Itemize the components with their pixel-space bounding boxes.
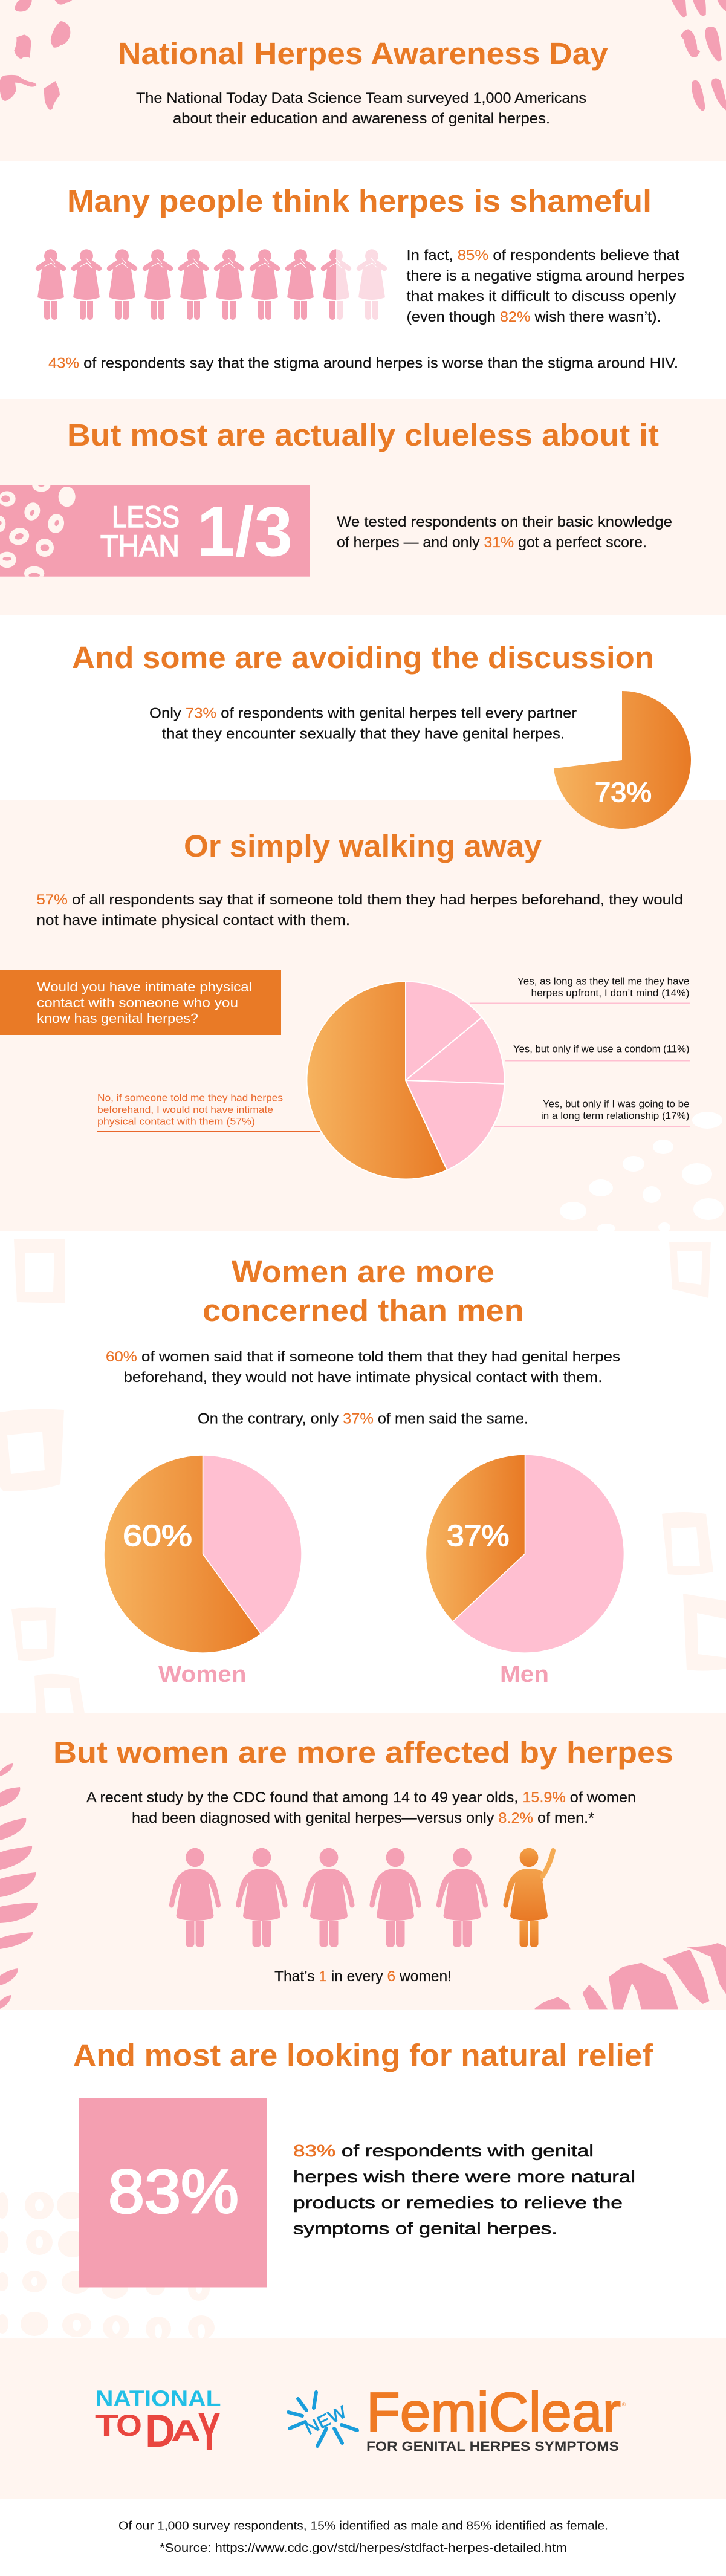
- stigma text: there is a negative stigma around herpes: [406, 268, 684, 284]
- pie chart: 73%: 73%: [595, 777, 652, 808]
- label: 14%: herpes upfront, I don’t mind (14%): [531, 988, 689, 999]
- panel: walking away: [0, 800, 726, 1233]
- label: Men: Men: [500, 1662, 549, 1687]
- callout: 83%: 83%: [108, 2157, 239, 2226]
- natural remedies text: symptoms of genital herpes.: [293, 2219, 557, 2238]
- icon: blue starburst: [288, 2392, 357, 2446]
- pie chart: women 60%: [104, 1455, 302, 1653]
- comparison text: beforehand, they would not have intimate physical contact with them.: [123, 1369, 602, 1386]
- stigma text: (even though 82% wish there wasn’t).: [406, 309, 661, 325]
- question box: contact with someone who you: [37, 995, 238, 1010]
- icon: orange woman: [503, 1848, 553, 1947]
- heading: But women are more affected by herpes: [53, 1735, 673, 1770]
- comparison text: On the contrary, only 37% of men said the same.: [198, 1411, 528, 1427]
- natural remedies text: 83% of respondents with genital: [293, 2141, 594, 2160]
- intro text: [136, 90, 586, 127]
- decoration: pink brush strokes at bottom right: [535, 1943, 726, 2009]
- decoration: top-right pink brush blotches: [672, 0, 726, 111]
- partner text: Only 73% of respondents with genital herpes tell every partner: [149, 705, 577, 722]
- label: 17%: in a long term relationship (17%): [541, 1111, 689, 1121]
- title: National Herpes Awareness Day: [118, 36, 609, 71]
- label: 14%: Yes, as long as they tell me they have: [517, 976, 689, 987]
- callout: less than 1/3: 1/3: [197, 492, 293, 571]
- heading: But most are actually clueless about it: [67, 418, 659, 452]
- heading: Many people think herpes is shameful: [67, 184, 652, 218]
- logo: FemiClear: FemiClear: [366, 2382, 621, 2443]
- natural remedies text: [293, 2141, 635, 2238]
- survey note: Of our 1,000 survey respondents, 15% identified as male and 85% identified as female.: [118, 2520, 608, 2533]
- intro text: about their education and awareness of genital herpes.: [173, 111, 550, 127]
- heading: And some are avoiding the discussion: [72, 640, 654, 675]
- knowledge text: of herpes — and only 31% got a perfect score.: [337, 534, 647, 551]
- question box: know has genital herpes?: [37, 1011, 198, 1026]
- decoration: pink leaves on left edge: [0, 1763, 38, 2009]
- intro text: not have intimate physical contact with them.: [36, 912, 350, 929]
- logo: FemiClear: ®: [622, 2402, 626, 2407]
- label: 57%: No, if someone told me they had herpes: [97, 1093, 283, 1104]
- panel: clueless: [0, 399, 726, 615]
- stigma text: [406, 247, 684, 325]
- comparison text: 60% of women said that if someone told them that they had genital herpes: [106, 1349, 620, 1365]
- question box: [0, 970, 281, 1035]
- pie chart: intimate contact answers: [306, 982, 504, 1179]
- decoration: pale rounded squares: [0, 1239, 726, 1713]
- callout: less than 1/3: LESS: [112, 500, 180, 534]
- icon row: five pink women, one orange woman raising her arm: [169, 1848, 553, 1947]
- partner text: that they encounter sexually that they have genital herpes.: [162, 725, 565, 742]
- logo: FemiClear: [288, 2382, 626, 2454]
- CDC study text: [86, 1789, 636, 1826]
- logo: National Today: A: [171, 2415, 201, 2447]
- question box: Would you have intimate physical: [37, 979, 252, 994]
- HIV comparison text: 43% of respondents say that the stigma around herpes is worse than the stigma around HIV.: [48, 355, 678, 371]
- decoration: top-left pink brush blotches: [0, 0, 72, 110]
- label: 17%: [494, 1099, 690, 1127]
- pie chart: women 60%: 60%: [123, 1520, 192, 1552]
- partner text: [149, 705, 577, 742]
- intro text: The National Today Data Science Team surveyed 1,000 Americans: [136, 90, 586, 106]
- pie chart: men 37%: 37%: [447, 1520, 509, 1552]
- heading: Women are more: [232, 1254, 494, 1289]
- callout: 83%: [79, 2098, 267, 2288]
- heading: Or simply walking away: [184, 829, 542, 863]
- panel: shame: [35, 189, 684, 371]
- knowledge text: We tested respondents on their basic knowledge: [337, 514, 672, 530]
- heading: concerned than men: [203, 1293, 524, 1328]
- logo: National Today: O: [116, 2409, 142, 2442]
- label: 57%: physical contact with them (57%): [97, 1116, 255, 1127]
- intro text: 57% of all respondents say that if someone told them they had herpes beforehand, they would: [36, 892, 683, 908]
- comparison text: [106, 1349, 620, 1427]
- logo: National Today: D: [145, 2406, 175, 2457]
- label: 17%: Yes, but only if I was going to be: [543, 1099, 689, 1110]
- label: 57%: [97, 1093, 320, 1132]
- natural remedies text: products or remedies to relieve the: [293, 2193, 623, 2212]
- logo: National Today: Y: [198, 2402, 221, 2462]
- pie chart: 73%: [554, 691, 691, 829]
- logo: FemiClear: FOR GENITAL HERPES SYMPTOMS: [366, 2439, 619, 2454]
- CDC study text: had been diagnosed with genital herpes—versus only 8.2% of men.*: [132, 1810, 594, 1826]
- intro text: [36, 892, 683, 929]
- panel: women more affected: [0, 1713, 726, 2010]
- panel: avoiding the discussion: [0, 615, 726, 829]
- knowledge text: [337, 514, 672, 551]
- panel: intro: [0, 0, 726, 161]
- decoration: pale rings behind the box: [0, 2192, 215, 2341]
- panel: logos: [0, 2338, 726, 2499]
- label: 14%: [470, 976, 690, 1004]
- panel: women vs men: [0, 1231, 726, 1713]
- panel: natural relief: [0, 2043, 653, 2338]
- logo: National Today: [95, 2386, 221, 2462]
- CDC study text: A recent study by the CDC found that among 14 to 49 year olds, 15.9% of women: [86, 1789, 636, 1806]
- pie chart: men 37%: [426, 1455, 624, 1653]
- icon row: ten women covering their faces, 85% filled: [37, 249, 385, 320]
- callout: less than 1/3: THAN: [100, 529, 180, 563]
- logo: National Today: NATIONAL: [96, 2386, 221, 2411]
- panel: footer: [0, 2499, 726, 2576]
- label: 11%: Yes, but only if we use a condom (11%): [513, 1043, 689, 1054]
- stigma text: that makes it difficult to discuss openly: [406, 288, 676, 305]
- heading: And most are looking for natural relief: [73, 2038, 653, 2072]
- 1 in 6 text: That’s 1 in every 6 women!: [274, 1968, 452, 1985]
- logo: FemiClear: NEW: [302, 2402, 350, 2439]
- callout: less than 1/3: [0, 479, 310, 580]
- heading: [203, 1254, 524, 1328]
- decoration: pale bubbles: [560, 1112, 724, 1233]
- label: Women: Women: [158, 1662, 247, 1687]
- natural remedies text: herpes wish there were more natural: [293, 2167, 635, 2186]
- logo: National Today: T: [95, 2409, 118, 2442]
- source: *Source: https://www.cdc.gov/std/herpes/stdfact-herpes-detailed.htm: [160, 2542, 567, 2555]
- label: 57%: beforehand, I would not have intimate: [97, 1105, 273, 1115]
- stigma text: In fact, 85% of respondents believe that: [406, 247, 679, 264]
